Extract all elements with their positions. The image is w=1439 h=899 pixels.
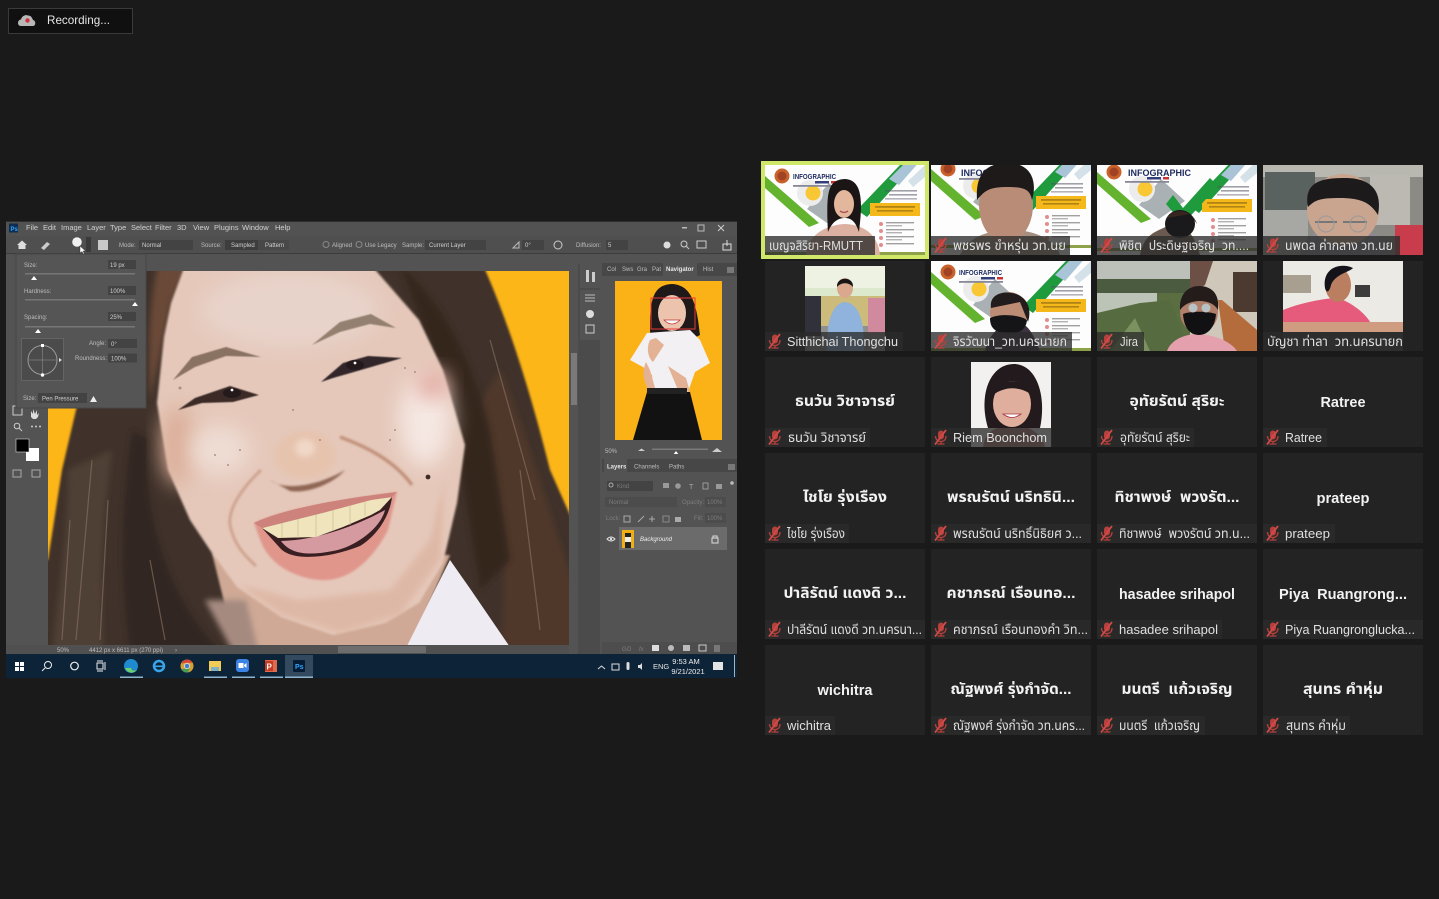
photoshop title and menu bar: Ps [10, 227, 19, 233]
layer filter row [607, 481, 734, 491]
tile: สุนทร คำหุ่ม [1263, 645, 1423, 735]
start button [15, 662, 24, 671]
photoshop taskbar icon: Ps [295, 664, 304, 671]
photoshop options bar [6, 236, 737, 254]
navigator tabs: Navigator [666, 267, 694, 273]
photoshop title and menu bar: Plugins [214, 223, 239, 232]
canvas: portrait photo [48, 271, 569, 645]
brush settings popup: 0° [111, 342, 117, 348]
navigator panel [602, 263, 737, 455]
tile: Piya Ruangrong: Piya Ruangronglucka... [1285, 622, 1415, 637]
brush settings popup: Size: [24, 263, 38, 269]
task view icon [97, 661, 105, 671]
zoom icon [236, 659, 249, 672]
eyes [178, 386, 259, 410]
lock row [606, 513, 726, 523]
tile: ธนวัน วิชาจารย์: ธนวัน วิชาจารย์ [795, 393, 895, 410]
blend mode row [605, 497, 726, 507]
status bar [6, 645, 569, 654]
tile: ไชโย รุ่งเรือง: ไชโย รุ่งเรือง [786, 526, 845, 541]
tile: ทิชาพงษ์: ทิชาพงษ์ พวงรัตน์ วท.น... [1119, 526, 1250, 541]
photoshop title and menu bar: View [193, 223, 210, 232]
navigator thumbnail [615, 281, 722, 440]
lock row: Lock: [606, 516, 621, 522]
edge icon [124, 659, 138, 673]
layers panel: Channels [634, 464, 659, 470]
internet explorer icon [154, 661, 164, 671]
icon: recording cloud [18, 15, 35, 26]
lock row: 100% [707, 516, 723, 522]
vertical scrollbar [569, 271, 578, 645]
navigator tabs: Sws [622, 267, 633, 273]
layer row: Background: Background [640, 537, 673, 543]
tile: Ratree: Ratree [1320, 394, 1366, 411]
tile: wichitra: wichitra [817, 682, 873, 699]
collapsed panel dock [578, 264, 600, 654]
photoshop title and menu bar: Edit [43, 223, 57, 232]
tile: พรณรัตน์ [931, 453, 1091, 543]
tile: มนตรี [1097, 645, 1257, 735]
powerpoint icon [265, 660, 277, 672]
tile: พิชิต: พิชิต ประดิษฐเจริญ วท.... [1119, 238, 1249, 253]
photoshop options bar: 0° [525, 243, 531, 249]
photoshop options bar: Mode: [119, 243, 136, 249]
photoshop options bar: Use Legacy [365, 243, 397, 249]
tile: พิชิต [1097, 165, 1257, 255]
recording indicator [8, 8, 132, 34]
eyebrows [173, 347, 261, 380]
left toolbar [6, 271, 48, 645]
tile: ไชโย รุ่งเรือง: ไชโย รุ่งเรือง [803, 488, 887, 506]
brush settings popup: Hardness: [24, 289, 52, 295]
photoshop options bar: Diffusion: [576, 243, 601, 249]
tile: Sitthichai Thongchu [765, 261, 925, 351]
background colour swatch [26, 448, 39, 461]
tile: Piya Ruangrong: Piya Ruangrong... [1279, 586, 1407, 603]
brush settings popup: Angle: [89, 341, 106, 347]
navigator tabs [607, 263, 734, 277]
tile: ทิชาพงษ์: ทิชาพงษ์ พวงรัต... [1114, 489, 1240, 506]
tile: อุทัยรัตน์ สุริยะ [1097, 357, 1257, 447]
tile: wichitra: wichitra [786, 718, 832, 733]
lock row: Fill: [694, 516, 704, 522]
document tab strip [6, 254, 737, 271]
layers panel [602, 454, 737, 654]
recording label: Recording... [47, 13, 110, 27]
navigator zoom slider [605, 448, 722, 455]
tile: wichitra [765, 645, 925, 735]
tile: บัญชา: บัญชา ท่าลา วท.นครนายก [1267, 334, 1403, 349]
brush settings popup [16, 254, 146, 408]
system tray [598, 655, 735, 677]
tile: ไชโย รุ่งเรือง [765, 453, 925, 543]
tile: คชาภรณ์ [931, 549, 1091, 639]
tile: hasadee srihapol [1097, 549, 1257, 639]
tile: prateep: prateep [1316, 490, 1370, 507]
tile: prateep [1263, 453, 1423, 543]
tile: คชาภรณ์: คชาภรณ์ เรือนทอ... [946, 585, 1076, 602]
tile: จิรวัฒนา [931, 261, 1091, 351]
navigator zoom slider: 50% [605, 449, 618, 455]
system tray: 9/21/2021 [671, 667, 705, 676]
tile: พิชิต: INFOGRAPHIC [1128, 168, 1192, 178]
photoshop title and menu bar: Layer [87, 223, 106, 232]
photoshop options bar: Source: [201, 243, 222, 249]
system tray: ENG [653, 662, 669, 671]
face [157, 265, 465, 635]
gallery: participant tiles [761, 138, 1423, 735]
status bar: 50% [57, 648, 70, 654]
photoshop options bar: Current Layer [429, 243, 466, 249]
layer filter row: Kind [617, 484, 629, 490]
nose shadow [270, 470, 345, 491]
navigator tabs: Pat [652, 267, 661, 273]
tile: พชรพร [931, 165, 1091, 255]
brush settings popup: Pen Pressure [42, 396, 79, 402]
file explorer icon [209, 661, 221, 671]
tile: ปาลิรัตน์: ปาลิรัตน์ แดงดิ ว... [784, 585, 906, 602]
photoshop title and menu bar [6, 221, 737, 236]
tile: มนตรี: มนตรี แก้วเจริญ [1122, 680, 1232, 698]
photoshop options bar: 5 [608, 243, 612, 249]
layers panel footer icons [602, 642, 737, 654]
blend mode row: Normal [609, 500, 628, 506]
tile: active speaker: INFOGRAPHIC [793, 172, 836, 181]
search icon [42, 662, 52, 671]
tile: Jira: Jira [1120, 334, 1139, 349]
navigator tabs: Gra [637, 267, 648, 273]
tile: active speaker [761, 161, 929, 259]
photoshop taskbar icon [285, 655, 313, 678]
tile: พรณรัตน์: พรณรัตน์ นริทธิ์นิธิยศ ว... [953, 526, 1082, 541]
status bar: 4412 px x 6611 px (270 ppi) [89, 648, 163, 654]
tile: ปาลิรัตน์ [765, 549, 925, 639]
tile: active speaker: เบญจสิริยา-RMUTT [769, 238, 863, 253]
screen share: Photoshop window [6, 221, 737, 678]
tile: ทิชาพงษ์ [1097, 453, 1257, 543]
photoshop options bar: Aligned [332, 243, 352, 249]
photoshop options bar: Sampled [231, 243, 255, 249]
photoshop title and menu bar: Help [275, 223, 290, 232]
photoshop title and menu bar: Type [110, 223, 126, 232]
photoshop options bar: Pattern [265, 243, 284, 249]
tile: Ratree: Ratree [1285, 430, 1322, 445]
chrome icon [180, 660, 194, 673]
brush settings popup: 100% [111, 356, 127, 362]
tile: พรณรัตน์: พรณรัตน์ นริทธินิ... [947, 489, 1075, 506]
blend mode row: Opacity: [682, 500, 704, 506]
brush settings popup: 19 px [110, 263, 125, 269]
tile: คชาภรณ์: คชาภรณ์ เรือนทองคำ วิท... [953, 622, 1088, 637]
system tray: 9:53 AM [672, 657, 700, 666]
tile: ณัฐพงศ์ [931, 645, 1091, 735]
tile: Ratree [1263, 357, 1423, 447]
photoshop title and menu bar: Select [131, 223, 153, 232]
tile: hasadee srihapol: hasadee srihapol [1119, 586, 1235, 603]
photoshop title and menu bar: 3D [177, 223, 187, 232]
brush settings popup: 100% [110, 289, 126, 295]
tile: สุนทร คำหุ่ม: สุนทร คำหุ่ม [1286, 718, 1346, 733]
tile: จิรวัฒนา: INFOGRAPHIC [959, 268, 1002, 277]
brush angle control [22, 338, 64, 380]
photoshop options bar: Normal [142, 243, 161, 249]
brush settings popup: Spacing: [24, 315, 48, 321]
nasolabial lines [340, 437, 412, 485]
photoshop options bar: Sample: [402, 243, 424, 249]
navigator view box [651, 298, 695, 329]
photoshop title and menu bar: File [26, 223, 38, 232]
tile: Sitthichai Thongchu: Sitthichai Thongchu [787, 334, 898, 349]
navigator tabs: Hist [703, 267, 714, 273]
tile: บัญชา [1263, 261, 1423, 351]
windows taskbar [6, 654, 737, 678]
blend mode row: 100% [707, 500, 723, 506]
layers panel footer icons: GO [622, 647, 632, 653]
neck [212, 553, 450, 650]
tile: Jira [1097, 261, 1257, 351]
tile: ณัฐพงศ์: ณัฐพงศ์ รุ่งกำจัด วท.นคร... [953, 718, 1085, 733]
layers panel footer icons: fx [639, 647, 645, 653]
tile: พชรพร: พชรพร ขำหรุ่น วท.นย [953, 238, 1066, 253]
tile: อุทัยรัตน์ สุริยะ: อุทัยรัตน์ สุริยะ [1130, 393, 1224, 410]
layer filter row: T [689, 484, 694, 491]
layers panel: Layers [607, 464, 627, 470]
collar [408, 560, 508, 645]
tile: มนตรี: มนตรี แก้วเจริญ [1119, 718, 1200, 733]
tile: อุทัยรัตน์ สุริยะ: อุทัยรัตน์ สุริยะ [1120, 430, 1190, 445]
skin shading [200, 272, 380, 348]
brush settings popup: Roundness: [75, 356, 107, 362]
status bar: › [175, 648, 177, 654]
tile: prateep: prateep [1285, 526, 1330, 541]
photoshop title and menu bar: Window [242, 223, 269, 232]
foreground colour swatch [16, 439, 29, 452]
tile: ปาลิรัตน์: ปาลีรัตน์ แดงดี วท.นครนา... [787, 622, 922, 637]
tile: สุนทร คำหุ่ม: สุนทร คำหุ่ม [1303, 680, 1383, 698]
hair [48, 271, 569, 645]
tile: พชรพร: INFOGRAPHIC [961, 168, 1025, 178]
powerpoint icon: P [266, 662, 272, 672]
tile: นพดล: นพดล ค่ากลาง วท.นย [1285, 238, 1393, 253]
layer row: Background [607, 527, 727, 550]
tile: จิรวัฒนา: จิรวัฒนา_วท.นครนายก [953, 334, 1067, 349]
tile: Piya Ruangrong [1263, 549, 1423, 639]
tile: ณัฐพงศ์: ณัฐพงศ์ รุ่งกำจัด... [950, 680, 1072, 698]
tile: นพดล [1263, 165, 1423, 255]
tile: ธนวัน วิชาจารย์ [765, 357, 925, 447]
freckles and mole [426, 475, 430, 479]
tile: Riem Boonchom: Riem Boonchom [953, 430, 1047, 445]
mouth [254, 492, 397, 580]
tile: ธนวัน วิชาจารย์: ธนวัน วิชาจารย์ [788, 430, 866, 445]
layers panel: Paths [669, 464, 684, 470]
photoshop title and menu bar: Filter [155, 223, 172, 232]
cortana icon [71, 662, 78, 670]
photoshop title and menu bar: Image [61, 223, 82, 232]
brush settings popup: Size: [23, 396, 37, 402]
tile: Riem Boonchom [931, 357, 1091, 447]
brush settings popup: 25% [110, 315, 123, 321]
navigator tabs: Col [607, 267, 616, 273]
tile: hasadee srihapol: hasadee srihapol [1119, 622, 1218, 637]
